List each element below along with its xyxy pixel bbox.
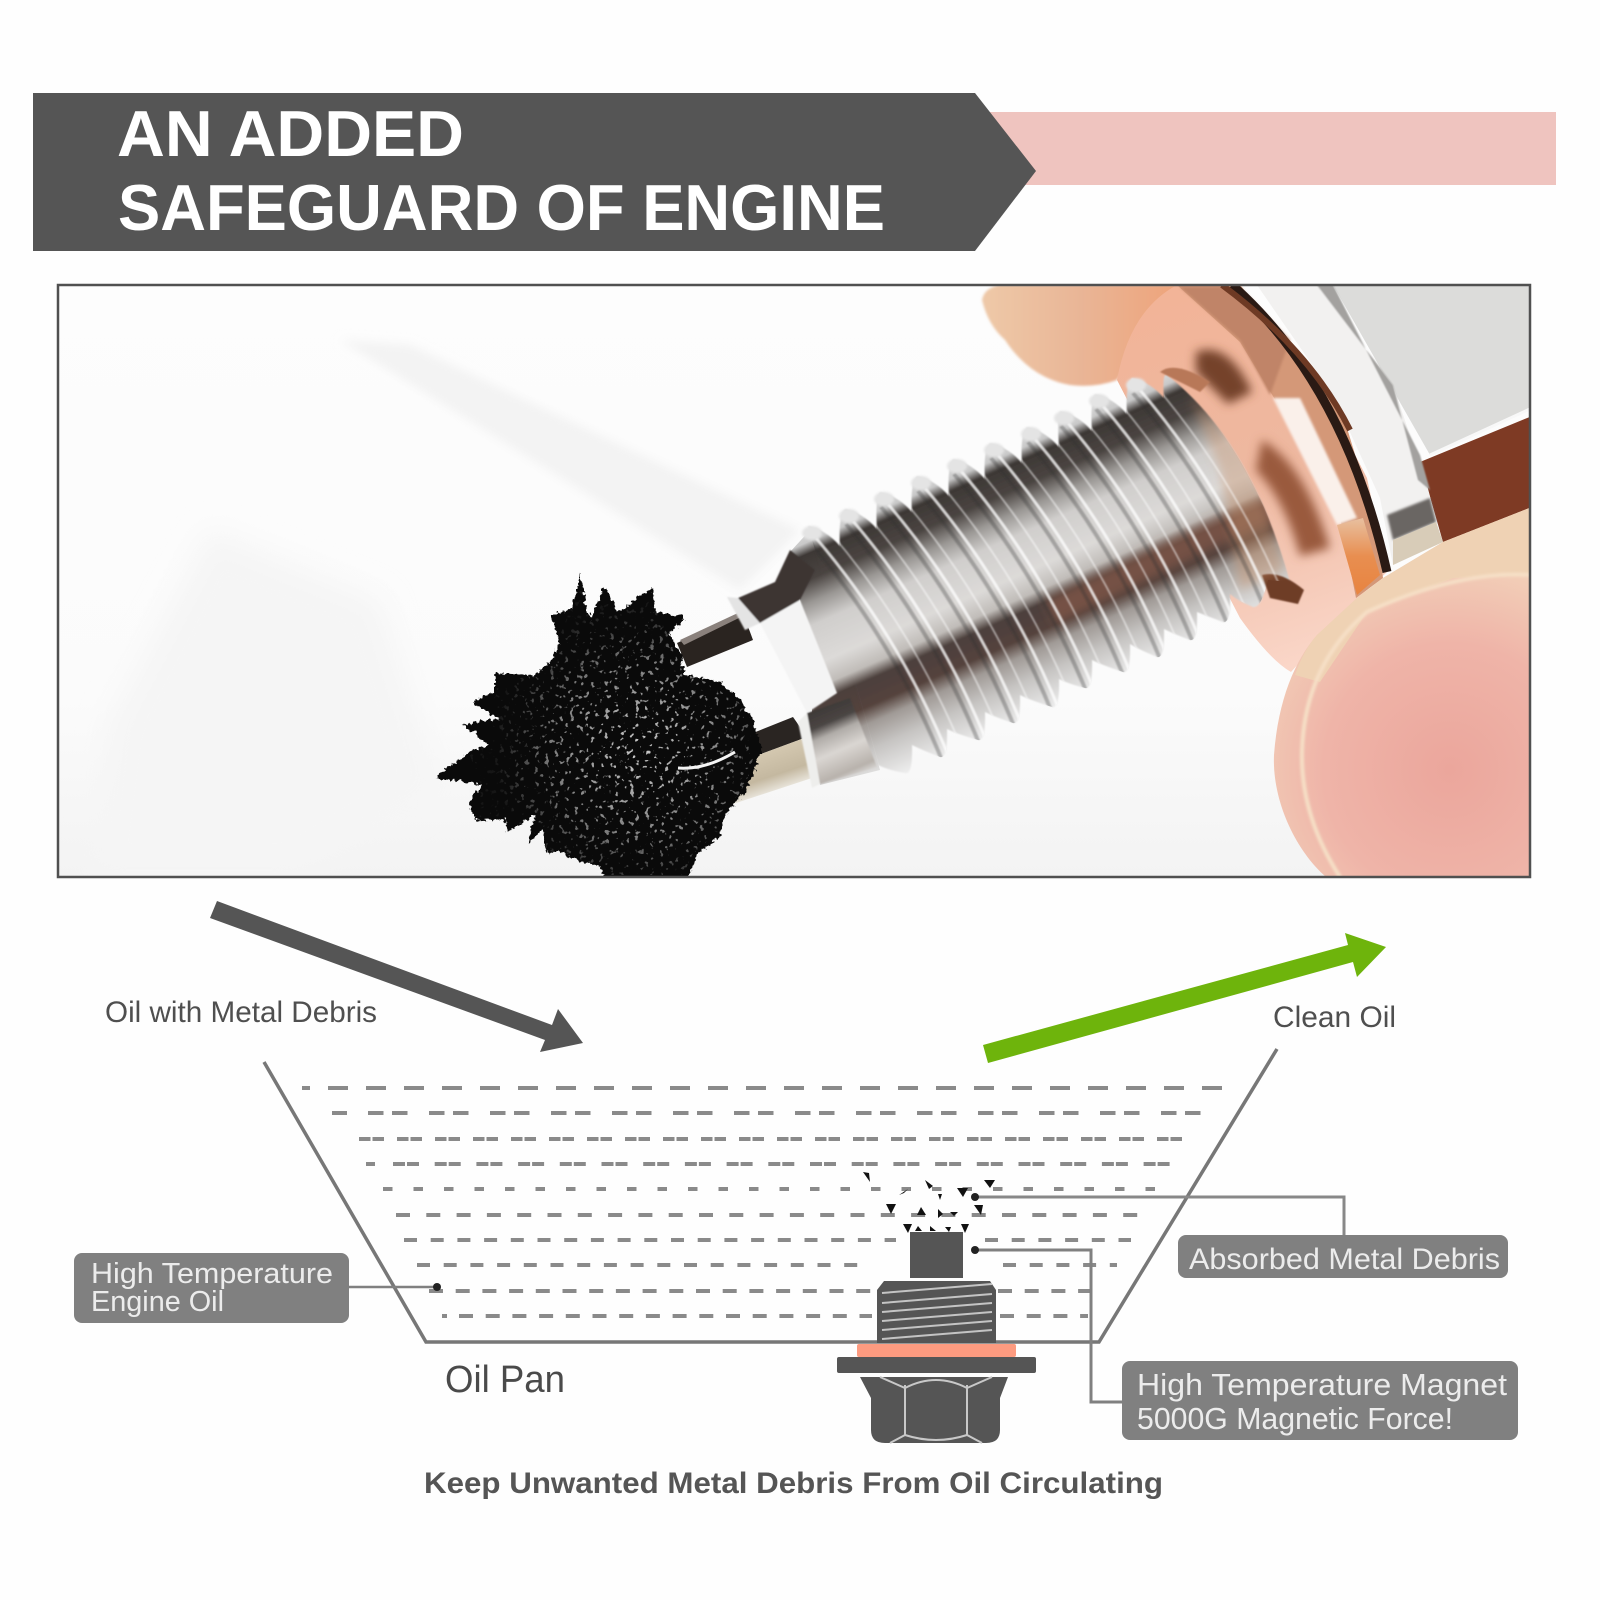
callout: absorbed metal debris: Absorbed Metal Debris <box>1189 1243 1500 1276</box>
header banner <box>33 93 1556 251</box>
callout: high temperature engine oil: High Temperature <box>91 1258 333 1290</box>
hex head <box>860 1377 1008 1443</box>
threaded body <box>877 1281 996 1343</box>
label: oil with metal debris: Oil with Metal Debris <box>105 996 377 1029</box>
photo frame <box>58 285 1530 877</box>
drain plug illustration <box>837 1172 1036 1443</box>
thread body <box>808 375 1290 773</box>
label: clean oil: Clean Oil <box>1273 1001 1396 1034</box>
callout: high temperature magnet <box>971 1246 1518 1440</box>
copper washer <box>857 1344 1016 1357</box>
copper washer <box>1117 285 1387 672</box>
panel: product photo <box>58 285 1532 880</box>
callout: high temperature magnet: High Temperature Magnet <box>1137 1367 1507 1402</box>
upper finger <box>982 285 1180 386</box>
hex head of drain plug <box>1222 285 1532 572</box>
pink accent bar <box>990 112 1556 185</box>
thread crest highlights <box>802 378 1146 540</box>
oil dashes <box>302 1088 1225 1316</box>
callout: high temperature engine oil: Engine Oil <box>91 1286 224 1318</box>
arrow: oil in (dark) <box>210 901 583 1052</box>
prongs <box>677 612 812 805</box>
caption: Keep Unwanted Metal Debris From Oil Circulating <box>424 1467 1163 1500</box>
threaded shaft <box>790 368 1304 785</box>
flange <box>837 1357 1036 1373</box>
absorbed debris particles <box>863 1172 995 1233</box>
title: AN ADDED <box>117 97 464 170</box>
oil pan diagram <box>264 1049 1277 1401</box>
callout: absorbed metal debris <box>971 1193 1508 1278</box>
label: oil pan: Oil Pan <box>445 1359 565 1401</box>
collar <box>727 550 877 788</box>
oil pan outline <box>264 1049 1277 1342</box>
photo background <box>60 344 1324 876</box>
callout: high temperature engine oil <box>74 1253 441 1323</box>
collar body behind threads <box>790 528 880 785</box>
arrow: clean oil out (green) <box>983 933 1386 1063</box>
metal debris cluster <box>433 570 770 880</box>
dark arrow banner <box>33 93 1036 251</box>
title <box>117 97 885 244</box>
title: SAFEGUARD OF ENGINE <box>118 171 885 244</box>
lower finger <box>1274 507 1532 877</box>
magnet <box>910 1232 963 1278</box>
callout: high temperature magnet: 5000G Magnetic Force! <box>1137 1401 1453 1436</box>
